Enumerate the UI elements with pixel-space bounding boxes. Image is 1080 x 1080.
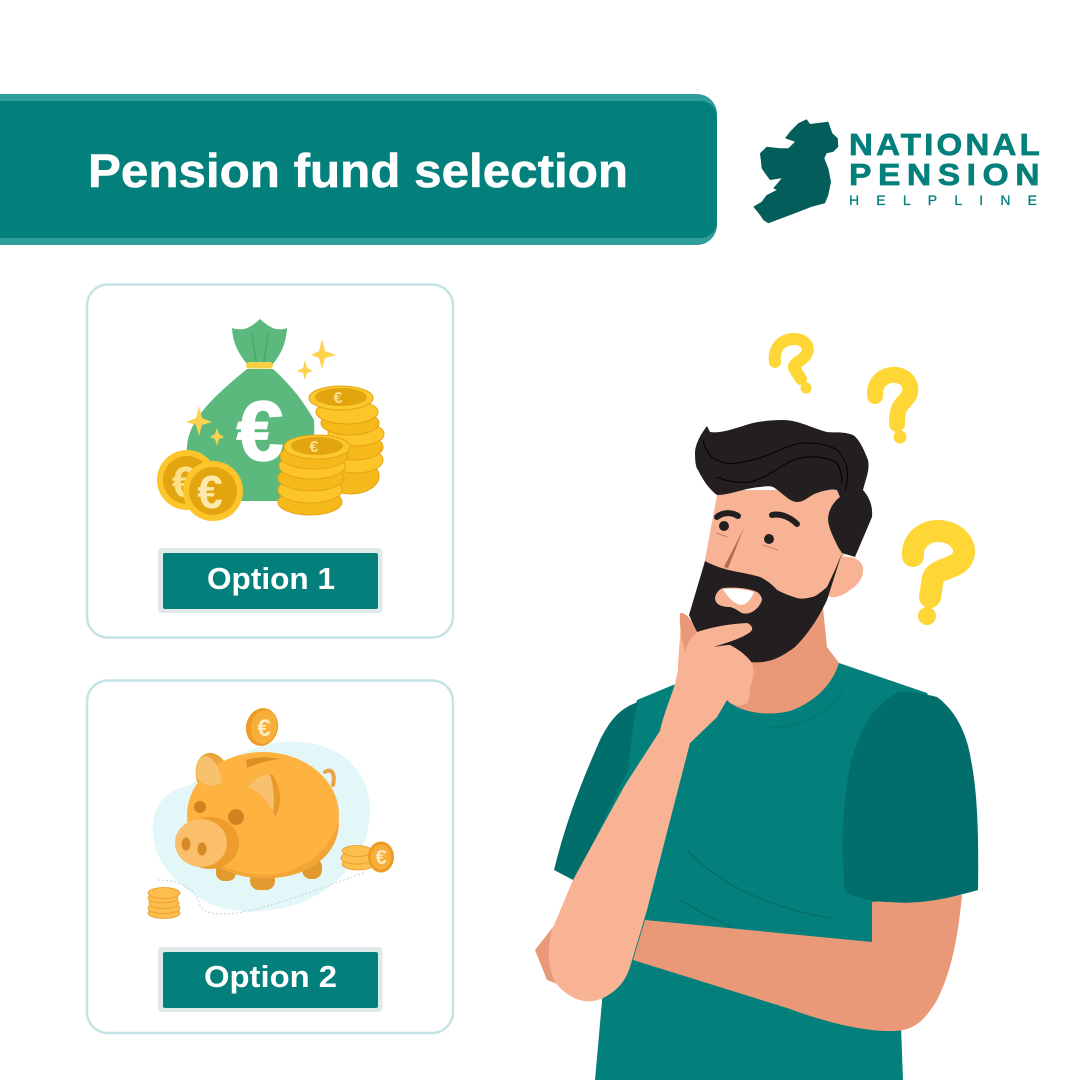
icon: question marks — [775, 339, 964, 625]
coins right — [341, 846, 374, 870]
face — [704, 490, 845, 620]
button: option 2: Option 2 — [204, 959, 337, 994]
icon: piggy bank with coins — [148, 705, 394, 918]
elbow — [535, 927, 560, 985]
sparkles — [186, 339, 336, 446]
falling coin — [242, 705, 282, 749]
front coin stack — [278, 435, 350, 515]
raised forearm — [549, 670, 730, 1001]
right ear — [248, 774, 280, 817]
logo wordmark: PENSION — [849, 157, 1046, 192]
nose — [724, 528, 744, 568]
legs — [216, 862, 236, 881]
lower arm — [633, 895, 962, 1031]
logo wordmark: NATIONAL — [849, 127, 1043, 162]
button: option 1 — [158, 548, 382, 613]
title: Pension fund selection — [88, 144, 628, 197]
icon: piggy bank with coins: € — [375, 847, 387, 869]
icon: piggy bank with coins: € — [257, 715, 271, 742]
left sleeve — [554, 702, 638, 881]
icon: green money bag with coins: € — [197, 466, 223, 518]
hair lines — [703, 440, 847, 490]
button: option 2 — [158, 947, 382, 1012]
mouth — [715, 588, 762, 614]
hair — [695, 420, 872, 557]
shirt folds — [687, 850, 830, 918]
panel: option 1 — [87, 284, 453, 638]
hand — [660, 613, 754, 743]
panel: option 2 — [87, 680, 453, 1033]
header banner — [0, 94, 717, 245]
body — [187, 752, 339, 878]
logo: National Pension Helpline — [753, 119, 1046, 223]
icon: green money bag with coins: € — [237, 384, 283, 478]
icon: green money bag with coins: € — [334, 390, 343, 407]
loose coins — [157, 450, 217, 510]
icon: map of Ireland — [753, 119, 838, 223]
logo wordmark — [849, 127, 1046, 208]
neck — [690, 608, 839, 714]
right sleeve — [843, 692, 978, 903]
eyes and brows — [716, 513, 797, 550]
logo wordmark: HELPLINE — [849, 192, 1037, 208]
button: option 1: Option 1 — [207, 561, 335, 596]
eyes — [194, 801, 206, 813]
icon: green money bag with coins: € — [310, 439, 319, 456]
coins left — [148, 888, 180, 918]
left ear — [196, 753, 227, 792]
tail — [325, 771, 334, 785]
illustration: thinking man — [535, 420, 978, 1080]
back coin stack — [309, 386, 384, 494]
shirt torso — [580, 663, 960, 1080]
icon: green money bag with coins: € — [172, 458, 196, 507]
snout — [181, 817, 239, 869]
icon: green money bag with coins — [157, 319, 384, 521]
beard — [689, 553, 842, 662]
ear — [830, 557, 863, 597]
